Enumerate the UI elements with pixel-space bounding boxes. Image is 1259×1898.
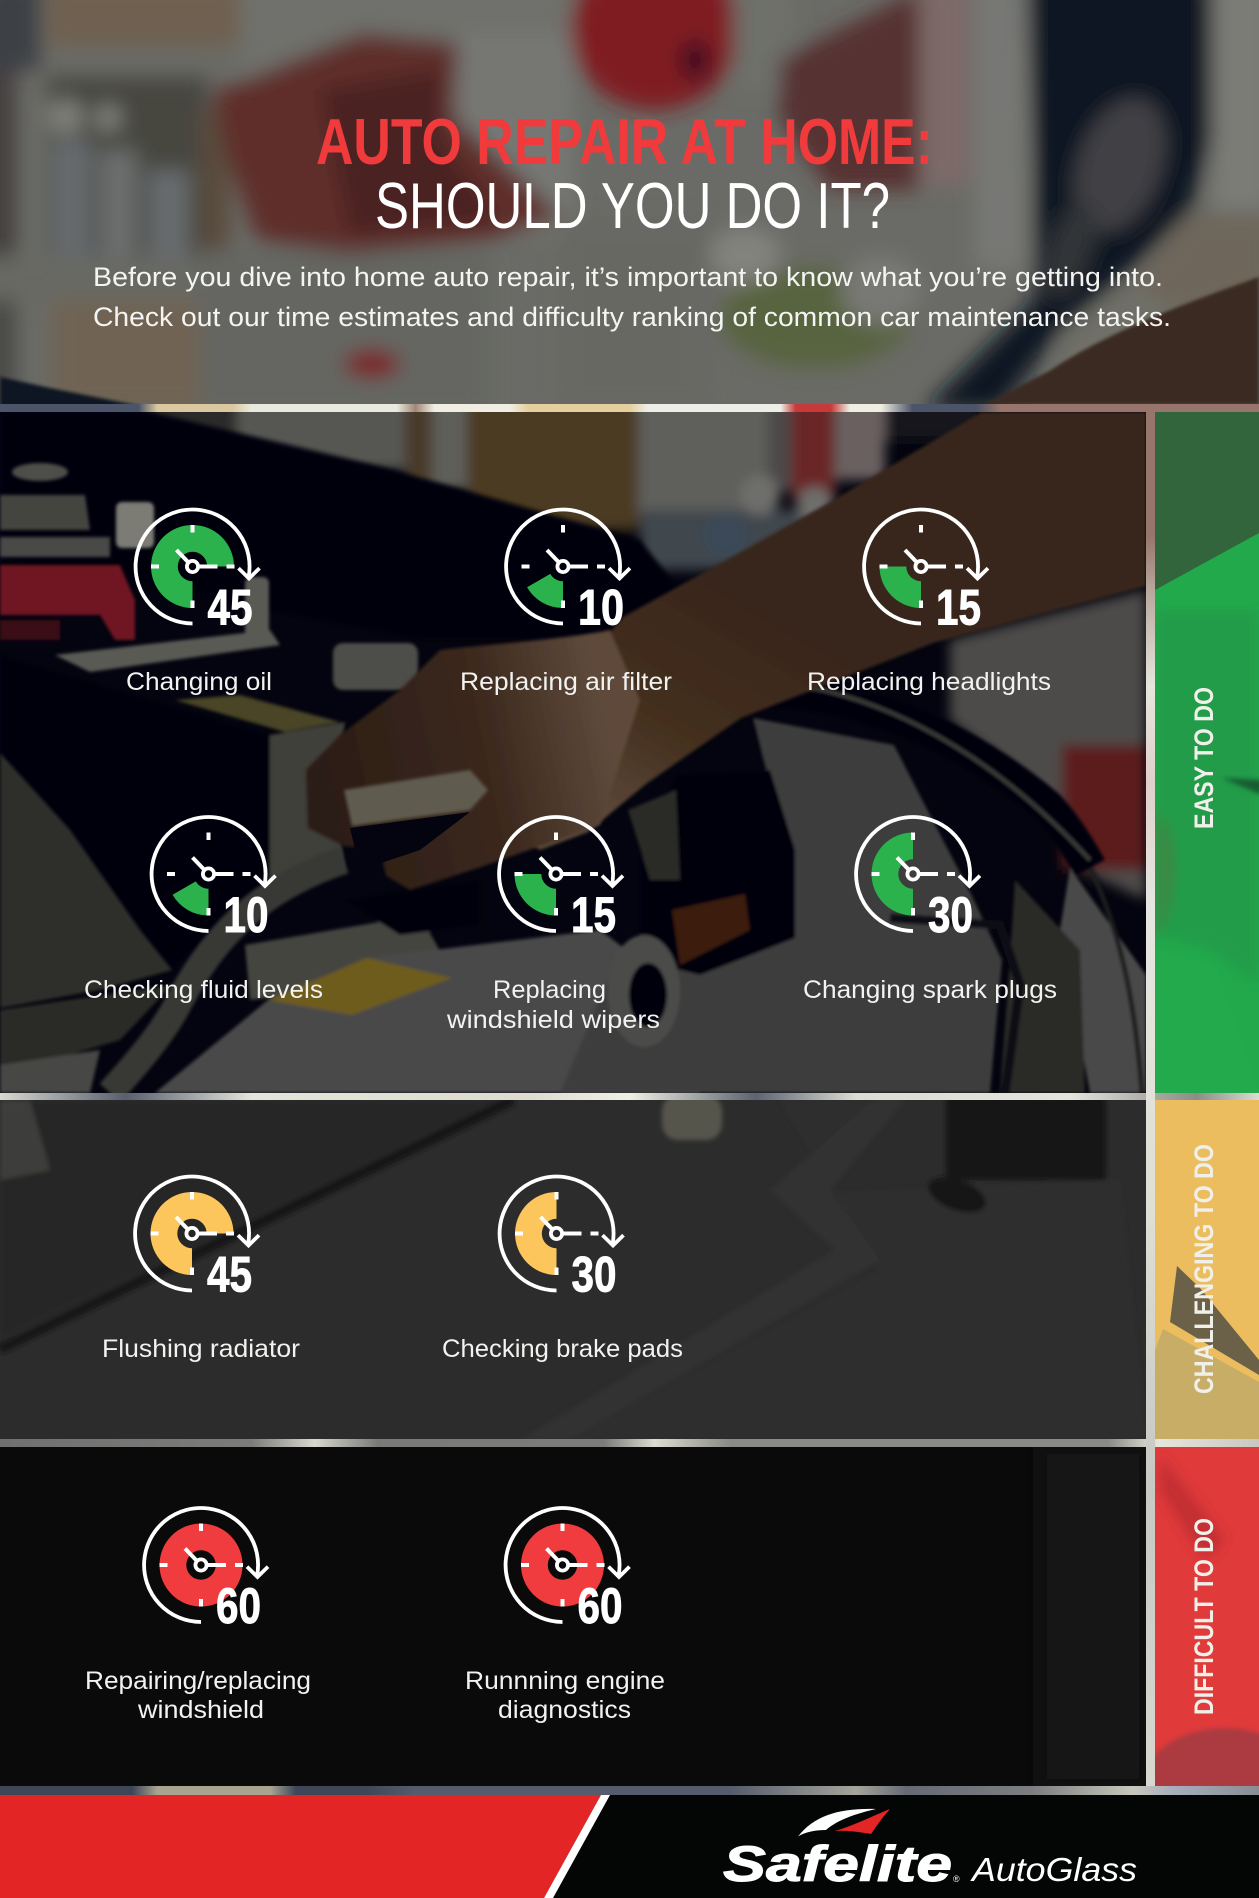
intro text: Check out our time estimates and difficulty ranking of common car maintenance tasks. bbox=[93, 302, 1171, 332]
icon: clock 45 bbox=[136, 510, 260, 636]
logo: Safelite AutoGlass: Safelite bbox=[723, 1836, 952, 1892]
icon: clock 60: 60 bbox=[578, 1578, 622, 1634]
radiator and engine cover bbox=[155, 920, 700, 1093]
icon: clock 45: 45 bbox=[207, 1246, 252, 1302]
icon: clock 30 bbox=[500, 1176, 624, 1302]
label: Runnning engine bbox=[465, 1667, 665, 1695]
logo: Safelite AutoGlass: AutoGlass bbox=[970, 1851, 1137, 1888]
horizontal light band: easy/challenging divider bbox=[0, 1093, 1259, 1100]
footer bbox=[0, 1795, 1259, 1898]
label bbox=[85, 1667, 311, 1724]
icon: clock 60: 60 bbox=[216, 1578, 261, 1634]
intro text: Before you dive into home auto repair, it’s important to know what you’re getting into. bbox=[93, 262, 1163, 292]
task: checking brake pads, 30 minutes bbox=[442, 1176, 683, 1363]
label: Repairing/replacing bbox=[85, 1667, 311, 1695]
logo: Safelite AutoGlass: ® bbox=[953, 1874, 960, 1884]
title bbox=[316, 105, 933, 242]
rubber hoses bbox=[0, 753, 344, 1093]
vertical light strip bbox=[1146, 412, 1155, 1786]
logo: Safelite AutoGlass bbox=[723, 1809, 1137, 1892]
forearm bbox=[470, 412, 1146, 850]
icon: clock 10: 10 bbox=[224, 887, 268, 943]
icon: clock 15 bbox=[864, 510, 988, 636]
label: Changing spark plugs bbox=[803, 976, 1057, 1004]
engine body bbox=[560, 682, 1146, 1093]
label: windshield bbox=[137, 1696, 264, 1724]
icon: clock 60 bbox=[506, 1508, 630, 1634]
task: replacing headlights, 15 minutes bbox=[807, 510, 1051, 696]
task: changing oil, 45 minutes bbox=[126, 510, 272, 696]
task: replacing windshield wipers, 15 minutes bbox=[446, 817, 660, 1034]
icon: clock 10 bbox=[506, 510, 630, 636]
title line 1: AUTO REPAIR AT HOME: bbox=[316, 105, 933, 178]
label: windshield wipers bbox=[446, 1006, 660, 1034]
task: checking fluid levels, 10 minutes bbox=[84, 817, 323, 1004]
icon: clock 10 bbox=[152, 817, 276, 943]
hand bbox=[306, 630, 640, 890]
task: replacing air filter, 10 minutes bbox=[460, 510, 672, 696]
label: Replacing air filter bbox=[460, 668, 672, 696]
label: Replacing headlights bbox=[807, 668, 1051, 696]
side label: difficult to do: DIFFICULT TO DO bbox=[1189, 1518, 1219, 1715]
label bbox=[465, 1667, 665, 1724]
horizontal light band: top bbox=[0, 404, 1259, 412]
task: repairing/replacing windshield, 60 minutes bbox=[85, 1508, 311, 1724]
footer red block bbox=[0, 1795, 601, 1898]
task: running engine diagnostics, 60 minutes bbox=[465, 1508, 665, 1724]
battery bbox=[0, 461, 420, 880]
garage right of the hood bbox=[950, 590, 1146, 900]
label bbox=[446, 976, 660, 1034]
panel: challenging to do side bar bbox=[1155, 1100, 1259, 1439]
task: flushing radiator, 45 minutes bbox=[102, 1176, 300, 1363]
icon: logo wing bbox=[798, 1809, 890, 1836]
side label: challenging to do: CHALLENGING TO DO bbox=[1189, 1144, 1219, 1394]
label: Checking fluid levels bbox=[84, 976, 323, 1004]
icon: clock 30: 30 bbox=[572, 1246, 616, 1302]
icon: clock 60 bbox=[144, 1508, 268, 1634]
icon: clock 15: 15 bbox=[936, 580, 981, 636]
side label: easy to do: EASY TO DO bbox=[1189, 687, 1219, 829]
icon: clock 30 bbox=[856, 817, 980, 943]
horizontal light band: bottom bbox=[0, 1786, 1259, 1795]
icon: clock 45: 45 bbox=[208, 580, 252, 636]
label: Changing oil bbox=[126, 668, 272, 696]
icon: clock 30: 30 bbox=[928, 887, 973, 943]
horizontal light band: challenging/difficult divider bbox=[0, 1439, 1259, 1447]
icon: clock 45 bbox=[135, 1176, 259, 1302]
title line 2: SHOULD YOU DO IT? bbox=[375, 169, 890, 242]
icon: clock 15 bbox=[499, 817, 623, 943]
icon: clock 15: 15 bbox=[571, 887, 616, 943]
label: diagnostics bbox=[498, 1696, 631, 1724]
intro text bbox=[93, 262, 1171, 332]
inner hood dark mass bbox=[142, 412, 673, 581]
label: Replacing bbox=[493, 976, 606, 1004]
panel: easy to do side bar bbox=[1155, 412, 1259, 1093]
icon: clock 10: 10 bbox=[578, 580, 624, 636]
label: Flushing radiator bbox=[102, 1335, 300, 1363]
label: Checking brake pads bbox=[442, 1335, 683, 1363]
task: changing spark plugs, 30 minutes bbox=[803, 817, 1057, 1004]
garage seen above the hood bbox=[150, 400, 980, 570]
panel: difficult to do side bar bbox=[1155, 1447, 1259, 1786]
